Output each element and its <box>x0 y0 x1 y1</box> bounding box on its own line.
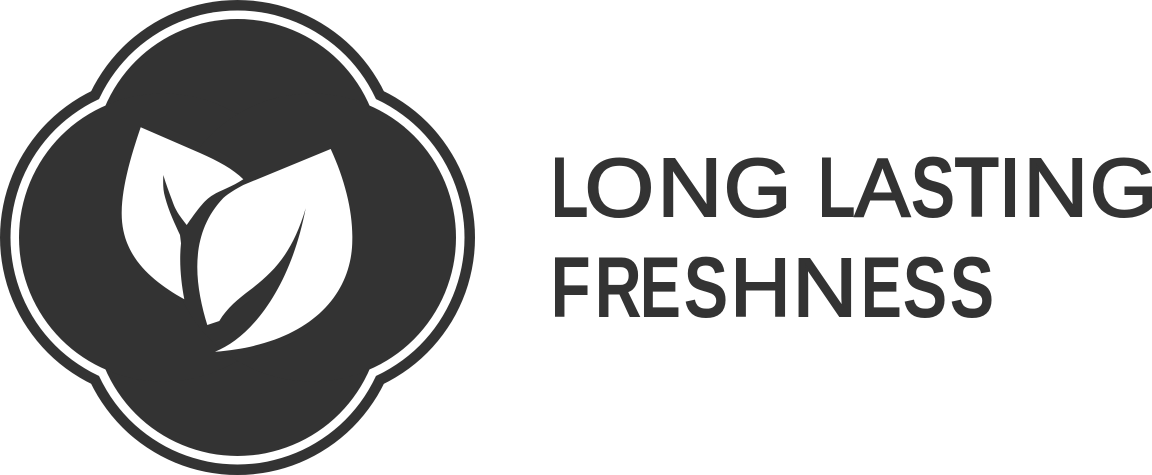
heading line 1: LONG LASTING: L <box>818 139 856 235</box>
icon: left leaf <box>122 127 243 299</box>
heading line 1: LONG LASTING: N <box>657 142 722 234</box>
heading line 2: FRESHNESS: R <box>595 240 642 336</box>
badge dark inner fill <box>19 19 456 456</box>
heading line 1: LONG LASTING: S <box>911 140 955 236</box>
heading line 1: LONG LASTING <box>551 139 1152 236</box>
heading line 2: FRESHNESS: E <box>861 239 902 335</box>
heading line 2: FRESHNESS: S <box>903 240 947 336</box>
icon: quatrefoil badge with leaves <box>0 0 475 475</box>
heading line 2: FRESHNESS <box>551 239 994 336</box>
heading line 2: FRESHNESS: H <box>730 241 791 334</box>
heading line 2: FRESHNESS: N <box>792 242 857 334</box>
badge white ring <box>10 10 464 464</box>
heading line 2: FRESHNESS: F <box>551 241 591 336</box>
heading: long lasting freshness <box>551 139 1152 336</box>
badge outer outline <box>0 0 475 475</box>
heading line 1: LONG LASTING: I <box>998 141 1022 234</box>
heading line 2: FRESHNESS: S <box>684 240 728 336</box>
heading line 1: LONG LASTING: A <box>855 141 911 234</box>
heading line 1: LONG LASTING: O <box>585 142 654 234</box>
heading line 1: LONG LASTING: G <box>724 142 792 235</box>
heading line 1: LONG LASTING: N <box>1023 142 1088 234</box>
heading line 1: LONG LASTING: T <box>954 140 999 235</box>
icon: right leaf <box>197 149 352 352</box>
heading line 2: FRESHNESS: E <box>640 239 681 335</box>
heading line 1: LONG LASTING: L <box>551 139 589 235</box>
heading line 2: FRESHNESS: S <box>950 240 994 336</box>
